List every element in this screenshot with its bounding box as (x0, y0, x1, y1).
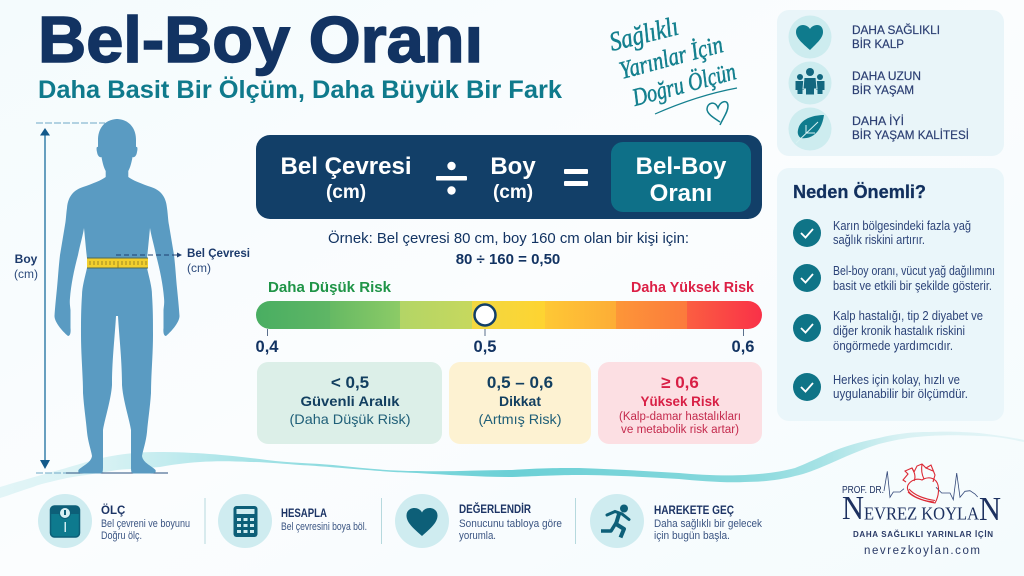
scale values: 0,4 (256, 338, 279, 356)
formula terms: (cm) (326, 182, 366, 203)
check item 3: diğer kronik hastalık riskini (833, 324, 965, 338)
check item 3: Kalp hastalığı, tip 2 diyabet ve (833, 309, 983, 323)
benefit labels: DAHA UZUN (852, 71, 921, 83)
panel: why it matters (777, 168, 1004, 421)
step: calculate: Bel çevresini boya böl. (281, 521, 367, 533)
scale values (256, 338, 754, 356)
formula terms (280, 153, 536, 203)
step: measure: Doğru ölç. (101, 530, 142, 542)
logo website: nevrezkoylan.com (864, 545, 980, 557)
step: evaluate: DEĞERLENDİR (459, 503, 532, 516)
check item 3: öngörmede yardımcıdır. (833, 339, 953, 353)
step: evaluate (395, 494, 562, 548)
benefit labels: BİR KALP (852, 38, 904, 51)
benefit labels: DAHA İYİ (852, 115, 904, 128)
waist arrow (116, 252, 182, 258)
step: evaluate: yorumla. (459, 530, 496, 542)
card: high risk: (Kalp-damar hastalıkları (619, 411, 741, 423)
lower risk label: Daha Düşük Risk (268, 279, 392, 296)
icon: heart (395, 494, 449, 548)
check item 4: uygulanabilir bir ölçümdür. (833, 387, 968, 401)
height label (14, 252, 38, 281)
card: caution (449, 362, 591, 444)
card: high risk: ve metabolik risk artar) (621, 424, 739, 436)
subtitle: Daha Basit Bir Ölçüm, Daha Büyük Bir Fark (38, 75, 562, 104)
result box (611, 142, 751, 212)
waist label: (cm) (187, 261, 211, 275)
higher risk label: Daha Yüksek Risk (631, 279, 755, 296)
check item 1: Karın bölgesindeki fazla yağ (833, 219, 971, 233)
waist label: Bel Çevresi (187, 246, 250, 260)
formula terms: (cm) (493, 182, 533, 203)
height label: (cm) (14, 267, 38, 281)
check item 3 (793, 309, 983, 353)
check item 1: sağlık riskini artırır. (833, 233, 925, 247)
formula terms: Bel Çevresi (280, 153, 412, 180)
handwritten slogan: Yarınlar İçin (617, 31, 726, 85)
logo name: PROF. DR. (842, 485, 884, 496)
check item 2 (793, 264, 995, 293)
card: caution: (Artmış Risk) (478, 411, 562, 427)
logo name: N (979, 491, 1001, 528)
result box: Oranı (650, 180, 712, 207)
logo (842, 464, 1001, 557)
handwritten slogan: Sağlıklı (606, 11, 681, 57)
check item 2: Bel-boy oranı, vücut yağ dağılımını (833, 264, 995, 278)
example text (328, 229, 689, 268)
card: safe range (257, 362, 442, 444)
card: high risk: Yüksek Risk (640, 393, 720, 409)
logo heart (903, 464, 939, 503)
logo name: N (842, 490, 864, 527)
result box: Bel-Boy (636, 153, 727, 180)
step: take action (590, 494, 762, 548)
step: calculate: HESAPLA (281, 508, 327, 520)
step: evaluate: Sonucunu tabloya göre (459, 518, 562, 530)
step: measure: Bel çevreni ve boyunu (101, 518, 190, 530)
card: high risk: ≥ 0,6 (661, 373, 699, 392)
card: high risk (598, 362, 762, 444)
benefit labels: DAHA SAĞLIKLI (852, 24, 940, 37)
handwritten slogan: Doğru Ölçün (629, 57, 739, 112)
scale values: 0,6 (732, 338, 754, 356)
card: caution: 0,5 – 0,6 (487, 373, 553, 392)
card: safe range: Güvenli Aralık (300, 393, 400, 409)
handwritten slogan (606, 11, 739, 125)
human silhouette (54, 119, 180, 474)
icon: family (788, 62, 832, 104)
formula terms: Boy (490, 153, 536, 180)
example text: 80 ÷ 160 = 0,50 (456, 251, 560, 268)
current value marker (474, 304, 496, 326)
equals sign (564, 169, 588, 186)
card: safe range: (Daha Düşük Risk) (290, 411, 410, 427)
benefit labels (852, 24, 969, 142)
risk scale bar (256, 301, 762, 336)
step: take action: HAREKETE GEÇ (654, 505, 734, 517)
check item 4 (793, 373, 968, 401)
example text: Örnek: Bel çevresi 80 cm, boy 160 cm olan bir kişi için: (328, 229, 689, 247)
logo ECG line (884, 471, 978, 500)
logo tagline: DAHA SAĞLIKLI YARINLAR İÇİN (853, 530, 993, 539)
icon: heart (788, 16, 832, 58)
benefit labels: BİR YAŞAM KALİTESİ (852, 129, 969, 142)
panel: benefits (777, 10, 1004, 156)
card: safe range: < 0,5 (331, 373, 369, 392)
waist label (187, 246, 250, 275)
check item 1 (793, 219, 971, 247)
icon: runner (590, 494, 644, 548)
card: caution: Dikkat (499, 393, 541, 409)
height label: Boy (15, 252, 38, 266)
check item 2: basit ve etkili bir şekilde gösterir. (833, 279, 992, 293)
measuring tape (87, 258, 148, 268)
panel heading: Neden Önemli? (793, 181, 926, 202)
height arrow (36, 123, 168, 473)
step: take action: Daha sağlıklı bir gelecek (654, 518, 762, 530)
step: measure: ÖLÇ (101, 504, 125, 517)
step: take action: için bugün başla. (654, 530, 730, 542)
check item 4: Herkes için kolay, hızlı ve (833, 373, 960, 387)
icon: leaf (788, 108, 832, 150)
icon: scale (38, 494, 92, 548)
divide sign (436, 162, 467, 195)
scale values: 0,5 (474, 338, 496, 356)
step: calculate (218, 494, 367, 548)
icon: calculator (218, 494, 272, 548)
benefit labels: BİR YAŞAM (852, 84, 914, 97)
logo name (842, 485, 1001, 528)
logo name: EVREZ KOYLA (864, 504, 979, 524)
step: measure (38, 494, 190, 548)
formula panel (256, 135, 762, 219)
title: Bel-Boy Oranı (38, 3, 483, 76)
